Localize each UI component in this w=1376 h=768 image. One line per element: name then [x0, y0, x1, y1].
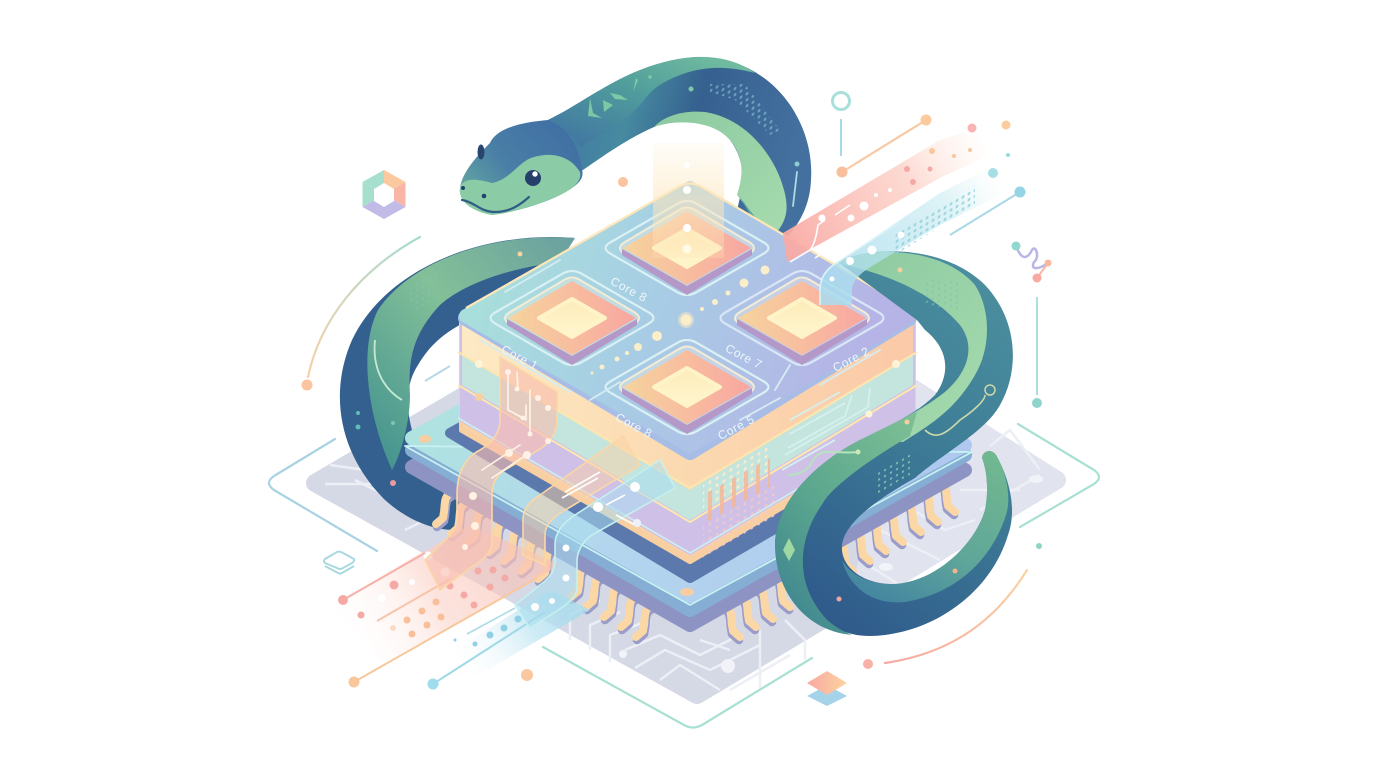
- far eye: [478, 144, 484, 160]
- icon: stacked diamonds: [807, 671, 847, 706]
- core: bottom: [606, 340, 768, 434]
- icon: squiggle circuit: [1012, 242, 1052, 282]
- light belly band: [654, 112, 787, 235]
- core labels: Core 7: [723, 341, 765, 372]
- board outer outline: [269, 424, 1099, 728]
- small dots: [521, 543, 1042, 681]
- snake: left coil (behind chip): [340, 237, 575, 530]
- hole accent lines: [425, 366, 450, 381]
- teal band stripes: [703, 458, 770, 524]
- core labels: Core 8: [613, 410, 655, 441]
- orange band dots: [703, 443, 770, 512]
- tail band: [842, 451, 1008, 602]
- arc: left: [302, 237, 420, 390]
- beam: lower-left blue fade: [428, 590, 590, 690]
- neck dots: [710, 84, 780, 135]
- data dots between cores: [590, 266, 770, 374]
- floating dots top right: [618, 120, 1010, 187]
- beam: lower-left pink and orange fade: [330, 525, 560, 688]
- ribbon: blue data channel: [515, 460, 675, 628]
- board traces: [325, 430, 1040, 690]
- core labels: Core 5: [715, 412, 757, 443]
- eye: [525, 170, 541, 186]
- nostrils and mouth: [461, 186, 529, 212]
- icon: hexagon: [362, 170, 406, 219]
- connector: right vertical line: [1032, 297, 1042, 408]
- chip substrate plate: [405, 285, 972, 625]
- snake: right coil in front of chip: [775, 251, 1013, 636]
- core: right: [720, 271, 884, 365]
- core: left: [490, 271, 654, 365]
- side wiring lines: [782, 388, 870, 470]
- right pins: [725, 485, 954, 640]
- connector: blue node line: [950, 186, 1026, 235]
- neck and upper body: [548, 57, 811, 245]
- connector: orange node line: [836, 114, 932, 178]
- icon: stacked layers outline: [324, 552, 354, 574]
- beam: upper-right blue: [820, 160, 1010, 305]
- ribbon: orange data channel: [523, 436, 640, 565]
- core labels: Core 8: [608, 274, 650, 305]
- ribbon: pink data channel: [425, 357, 557, 590]
- green front crescent: [775, 412, 917, 635]
- arc: lower right: [863, 570, 1027, 669]
- light band: [840, 252, 987, 442]
- head: [460, 120, 583, 215]
- core labels: Core 1: [499, 342, 541, 373]
- snake dots and details: [783, 268, 995, 602]
- left pins: [437, 497, 651, 640]
- core labels: Core 2: [830, 344, 872, 375]
- snake: head and neck: [460, 57, 811, 245]
- board pads: [619, 475, 1043, 673]
- purple band dots: [703, 482, 776, 558]
- chip tower layers: [458, 187, 917, 561]
- upward light beam from top core: [653, 143, 724, 258]
- right body: [775, 251, 1013, 636]
- chip pins: [436, 482, 955, 640]
- beam: upper-right pink: [783, 120, 1000, 262]
- chip top surface: [466, 184, 909, 452]
- plate pads: [419, 435, 694, 596]
- core: top: [606, 201, 768, 295]
- circuit board base: [315, 263, 1057, 695]
- connector: ring pin: [832, 92, 850, 156]
- surface circuit lines: [480, 260, 880, 420]
- neck scale marks: [588, 75, 652, 118]
- core labels: [499, 274, 872, 443]
